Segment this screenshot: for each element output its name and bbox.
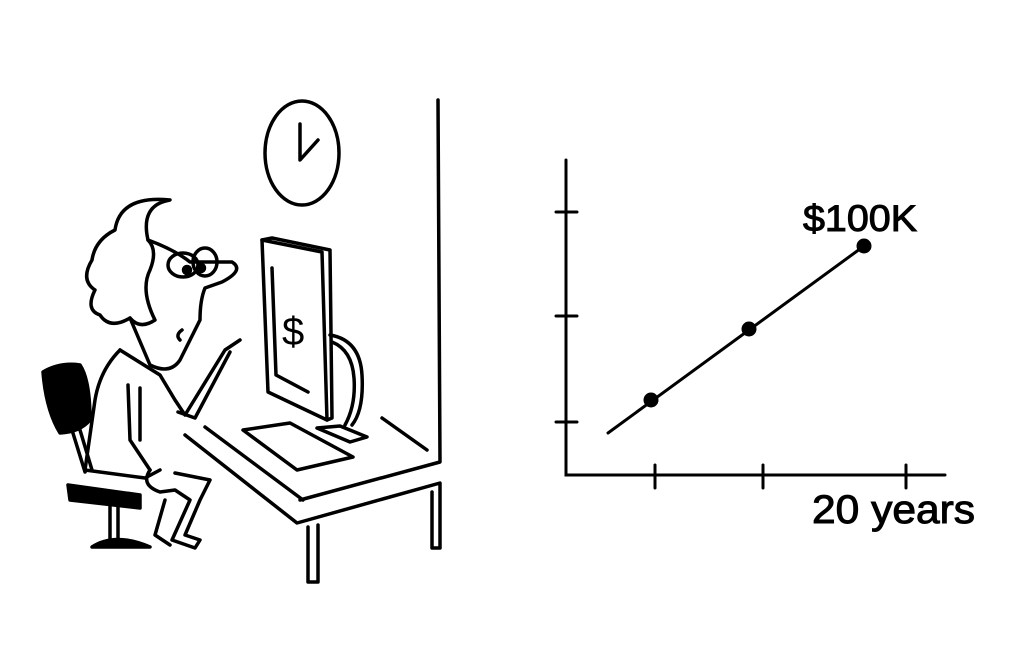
computer monitor: $ <box>282 310 304 354</box>
mouse pad <box>317 426 367 442</box>
label: 20 years: 20 years <box>812 488 975 532</box>
keyboard <box>243 423 353 470</box>
desk <box>185 418 440 582</box>
axes <box>556 160 945 488</box>
computer monitor <box>262 238 362 425</box>
cartoon: office scene <box>43 100 440 582</box>
chair <box>43 364 150 547</box>
person <box>85 199 240 548</box>
icon: wall clock <box>265 101 339 205</box>
trend line <box>608 240 870 433</box>
chart: growth line graph <box>556 160 945 488</box>
wall edge <box>300 100 440 500</box>
label: $100K: $100K <box>803 198 917 239</box>
